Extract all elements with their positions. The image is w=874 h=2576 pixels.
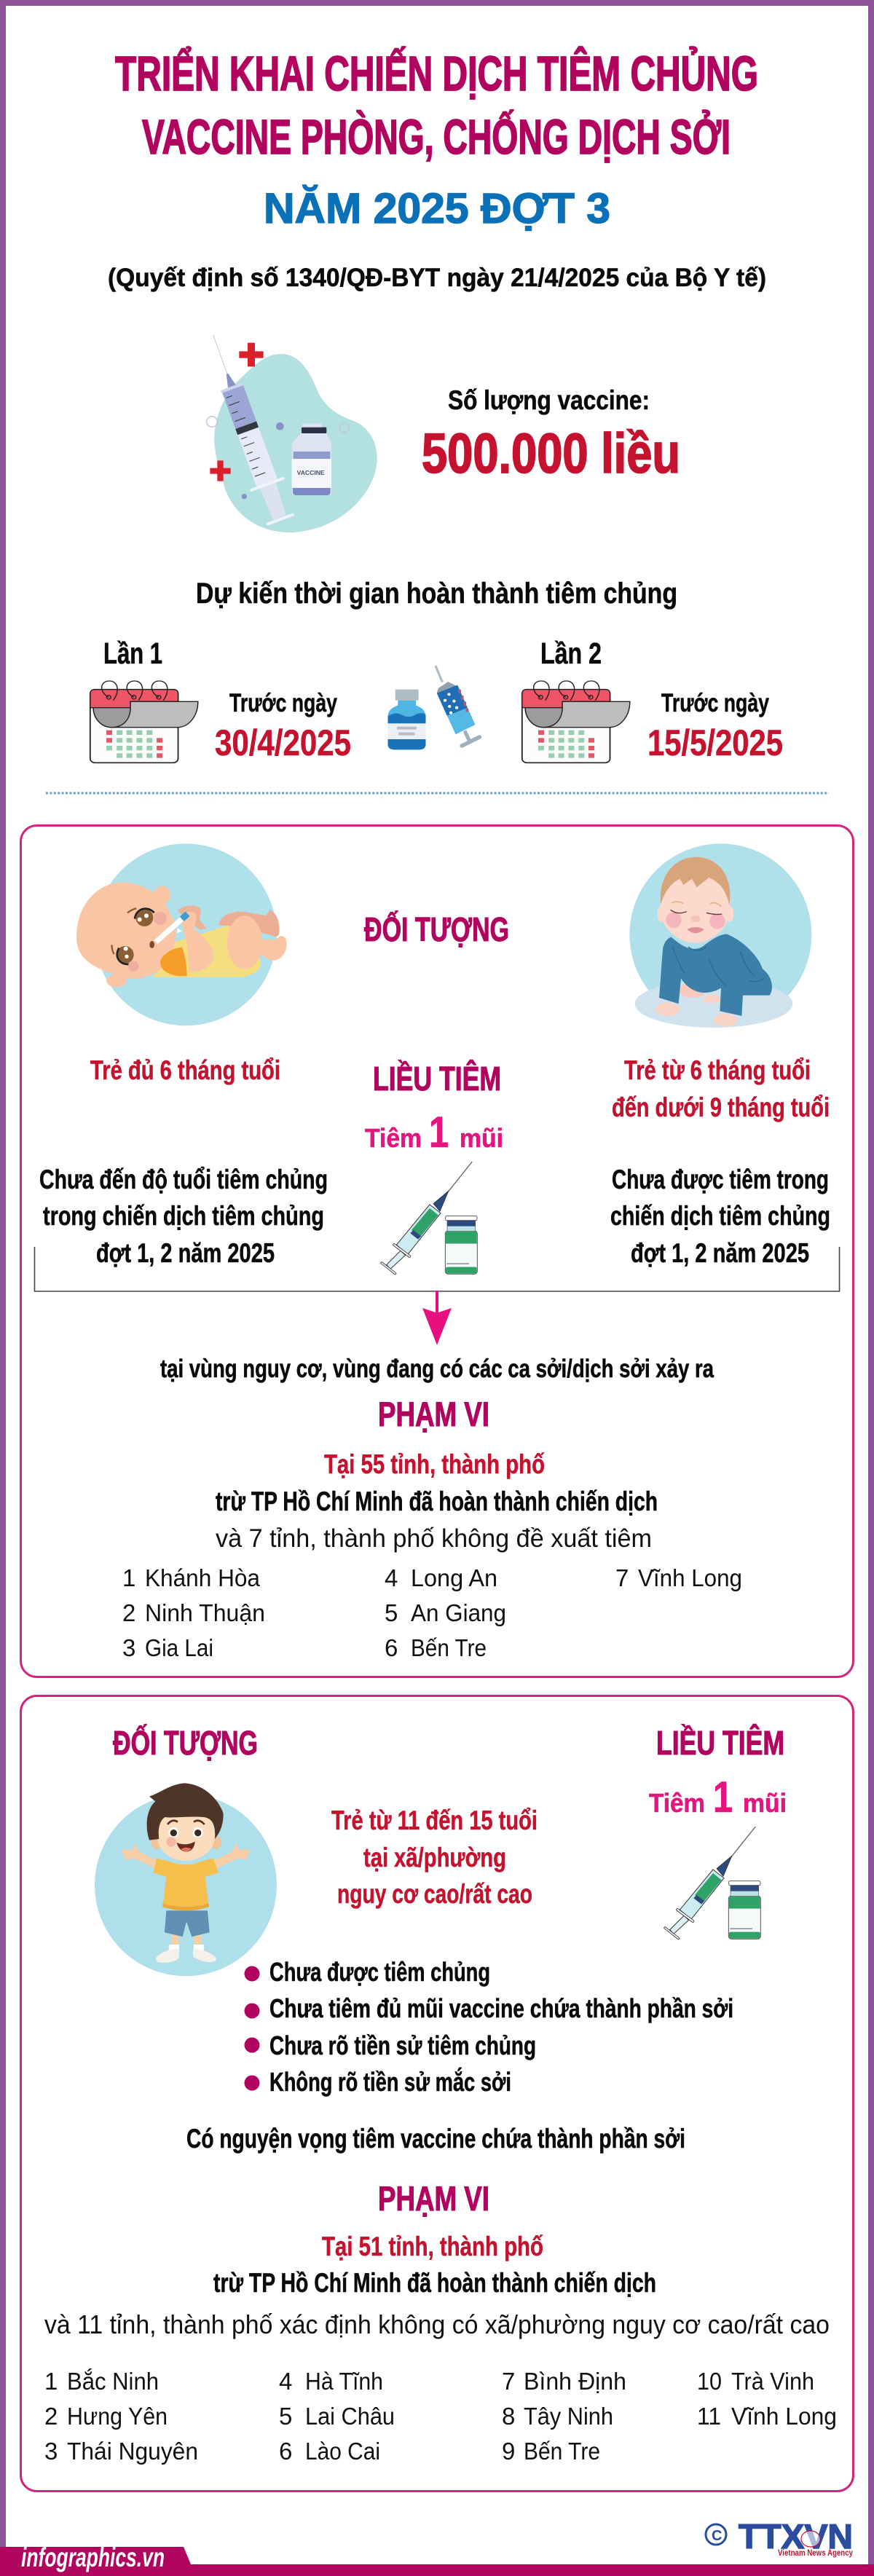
dose heading: LIỀU TIÊM xyxy=(373,1060,501,1098)
province list: Lai Châu xyxy=(305,2403,395,2430)
scope heading: PHẠM VI xyxy=(378,1395,489,1433)
province list: Bình Định xyxy=(524,2368,626,2395)
dose count xyxy=(365,1108,503,1157)
panel: children 6 to 9 months xyxy=(20,826,854,1677)
icon: syringe and vaccine vial xyxy=(196,328,377,532)
province list: 5 xyxy=(385,1599,398,1626)
location text: tại vùng nguy cơ, vùng đang có các ca sởi/dịch sởi xảy ra xyxy=(160,1355,714,1383)
province list xyxy=(122,1564,742,1661)
dose count: 1 xyxy=(713,1773,733,1821)
right group label: Trẻ từ 6 tháng tuổi xyxy=(624,1055,811,1085)
dose heading: LIỀU TIÊM xyxy=(656,1724,784,1762)
round 2 label: Lần 2 xyxy=(540,637,602,670)
province list: 9 xyxy=(502,2438,515,2465)
arrow xyxy=(422,1291,452,1345)
icon: syringe and vial xyxy=(665,1827,760,1939)
date 2: 15/5/2025 xyxy=(647,722,783,763)
province list: Vĩnh Long xyxy=(638,1564,742,1591)
scope count: Tại 51 tỉnh, thành phố xyxy=(322,2232,543,2261)
dose count: mũi xyxy=(743,1788,787,1818)
province list: Tây Ninh xyxy=(524,2403,613,2430)
dose count: Tiêm xyxy=(649,1788,705,1818)
decision reference: (Quyết định số 1340/QĐ-BYT ngày 21/4/2025 của Bộ Y tế) xyxy=(108,264,766,292)
exception note: và 7 tỉnh, thành phố không đề xuất tiêm xyxy=(216,1524,652,1553)
province list: Bắc Ninh xyxy=(67,2368,159,2395)
scope count: Tại 55 tỉnh, thành phố xyxy=(324,1449,545,1479)
bullet text: Chưa được tiêm chủng xyxy=(269,1957,490,1987)
bullet dots xyxy=(245,1966,259,2090)
province list xyxy=(44,2368,837,2465)
left group conditions: trong chiến dịch tiêm chủng xyxy=(43,1201,324,1231)
logo: TTXVN: Vietnam News Agency xyxy=(778,2548,853,2558)
province list: 6 xyxy=(385,1634,398,1661)
target group: Trẻ từ 11 đến 15 tuổi xyxy=(331,1805,538,1835)
province list: 7 xyxy=(502,2368,515,2395)
illustration: baby with thermometer xyxy=(76,843,287,1025)
scope heading: PHẠM VI xyxy=(378,2179,489,2218)
right group label xyxy=(612,1055,830,1122)
province list: 5 xyxy=(279,2403,292,2430)
icon: calendar 2 xyxy=(522,681,630,763)
province list: Hà Tĩnh xyxy=(305,2368,383,2395)
header xyxy=(108,47,766,292)
schedule: round 1 xyxy=(90,637,351,763)
subject heading: ĐỐI TƯỢNG xyxy=(364,910,509,948)
exception note: và 11 tỉnh, thành phố xác định không có xã/phường nguy cơ cao/rất cao xyxy=(44,2309,830,2339)
exception: trừ TP Hồ Chí Minh đã hoàn thành chiến dịch xyxy=(216,1486,658,1516)
icon: syringe and vaccine vial: VACCINE xyxy=(297,470,325,476)
logo: TTXVN: TTXVN xyxy=(739,2517,853,2556)
target group: tại xã/phường xyxy=(363,1843,506,1872)
province list: 1 xyxy=(122,1564,135,1591)
schedule heading: Dự kiến thời gian hoàn thành tiêm chủng xyxy=(196,578,677,610)
dose count: mũi xyxy=(460,1123,503,1153)
panel frame xyxy=(20,826,854,1677)
logo: TTXVN: C xyxy=(712,2528,722,2544)
illustration: boy xyxy=(95,1783,277,1976)
date 1: 30/4/2025 xyxy=(215,722,351,763)
province list: Bến Tre xyxy=(411,1634,487,1661)
province list: Thái Nguyên xyxy=(67,2438,198,2465)
vaccine quantity xyxy=(422,385,680,485)
province list: 3 xyxy=(44,2438,58,2465)
dose count xyxy=(649,1773,787,1821)
dose count: Tiêm xyxy=(365,1123,422,1153)
province list: 2 xyxy=(44,2403,58,2430)
title xyxy=(115,47,758,165)
icon: calendar 1 xyxy=(90,681,198,763)
wish statement: Có nguyện vọng tiêm vaccine chứa thành phần sởi xyxy=(186,2124,685,2154)
dose count: 1 xyxy=(429,1108,449,1157)
province list: 4 xyxy=(385,1564,398,1591)
bullet text: Chưa tiêm đủ mũi vaccine chứa thành phần sởi xyxy=(269,1993,733,2023)
province list: 7 xyxy=(615,1564,629,1591)
left group conditions: đợt 1, 2 năm 2025 xyxy=(96,1238,275,1268)
right group conditions xyxy=(610,1165,830,1268)
year subtitle: NĂM 2025 ĐỢT 3 xyxy=(264,185,610,232)
bracket xyxy=(35,1247,839,1291)
province list: An Giang xyxy=(411,1599,506,1626)
left group label: Trẻ đủ 6 tháng tuổi xyxy=(90,1055,280,1085)
province list: 4 xyxy=(279,2368,292,2395)
left group conditions xyxy=(39,1165,328,1268)
schedule: round 2 xyxy=(522,637,783,763)
bullet text xyxy=(269,1957,733,2097)
province list: Trà Vinh xyxy=(731,2368,814,2395)
bullet text: Không rõ tiền sử mắc sởi xyxy=(269,2066,511,2097)
footer bar xyxy=(0,2542,874,2576)
illustration: crawling baby xyxy=(629,843,811,1028)
province list: Ninh Thuận xyxy=(145,1599,265,1626)
round 1 label: Lần 1 xyxy=(103,637,162,670)
province list: 1 xyxy=(44,2368,58,2395)
panel frame xyxy=(20,1695,854,2491)
province list: Lào Cai xyxy=(305,2438,380,2465)
province list: 8 xyxy=(502,2403,515,2430)
before date label 1: Trước ngày xyxy=(229,689,337,717)
subject heading: ĐỐI TƯỢNG xyxy=(113,1724,258,1762)
province list: 3 xyxy=(122,1634,135,1661)
panel: children 11 to 15 years xyxy=(20,1695,854,2491)
province list: 6 xyxy=(279,2438,292,2465)
quantity value: 500.000 liều xyxy=(422,422,680,485)
province list: Hưng Yên xyxy=(67,2403,168,2430)
before date label 2: Trước ngày xyxy=(661,689,769,717)
quantity label: Số lượng vaccine: xyxy=(448,385,650,415)
province list: Long An xyxy=(411,1564,497,1591)
target group xyxy=(331,1805,538,1909)
province list: 10 xyxy=(697,2368,722,2395)
province list: Khánh Hòa xyxy=(145,1564,261,1591)
province list: Bến Tre xyxy=(524,2438,600,2465)
province list: Vĩnh Long xyxy=(731,2403,837,2430)
criteria list xyxy=(245,1957,733,2097)
left group conditions: Chưa đến độ tuổi tiêm chủng xyxy=(39,1165,328,1194)
exception: trừ TP Hồ Chí Minh đã hoàn thành chiến dịch xyxy=(213,2268,656,2298)
target group: nguy cơ cao/rất cao xyxy=(337,1879,532,1909)
province list: Gia Lai xyxy=(145,1634,213,1661)
bullet text: Chưa rõ tiền sử tiêm chủng xyxy=(269,2031,536,2060)
right group conditions: đợt 1, 2 năm 2025 xyxy=(631,1238,809,1268)
province list: 2 xyxy=(122,1599,135,1626)
site name: infographics.vn xyxy=(21,2542,165,2572)
province list: 11 xyxy=(697,2403,721,2430)
icon: syringe and vial xyxy=(382,1162,477,1274)
icon: bottle and syringe xyxy=(388,666,479,749)
